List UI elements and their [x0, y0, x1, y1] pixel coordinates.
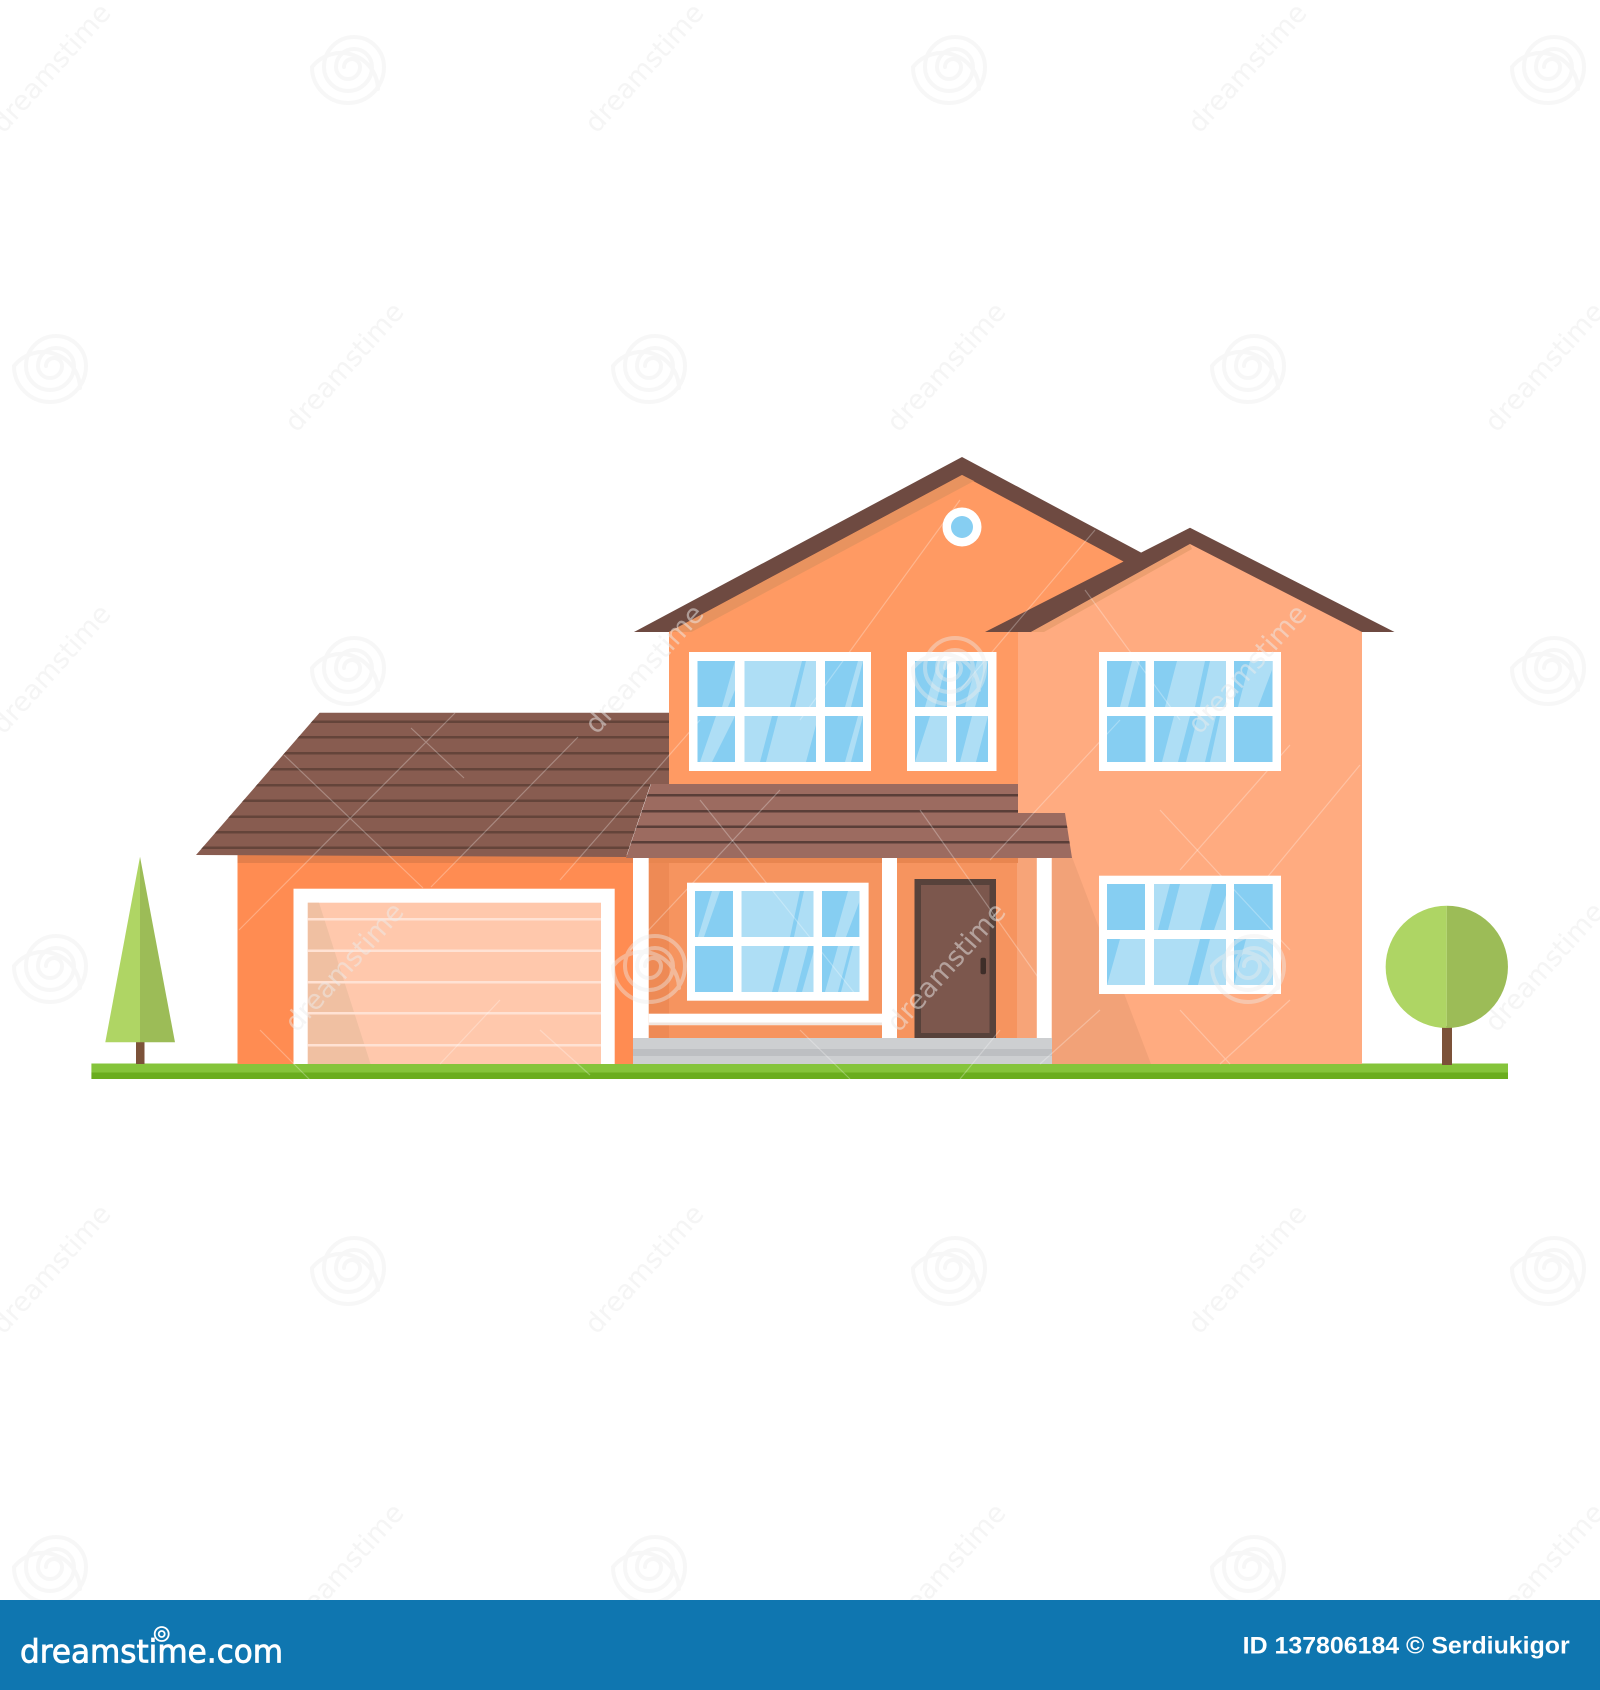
porch steps: [633, 1038, 1052, 1064]
watermark pattern: dreamstime: [279, 897, 410, 1038]
icon: round tree: [1386, 906, 1508, 1065]
window: upper right triple: [1099, 652, 1281, 771]
main gable with roof: [634, 457, 1290, 786]
watermark pattern: dreamstime: [279, 1498, 410, 1639]
watermark pattern: dreamstime: [579, 599, 710, 740]
right wing with roof: [985, 528, 1394, 1064]
icon: cone tree: [105, 857, 175, 1064]
ground strip: [91, 1064, 1508, 1079]
watermark pattern: dreamstime: [1182, 1199, 1313, 1340]
watermark pattern: dreamstime: [881, 1498, 1012, 1639]
watermark pattern: dreamstime: [881, 297, 1012, 438]
porch roof: [620, 784, 1080, 858]
watermark pattern: dreamstime: [279, 297, 410, 438]
window: upper middle double: [907, 652, 996, 771]
front door: [914, 879, 996, 1038]
porch window: [687, 883, 869, 1001]
footer logo text: dreamstime.com: [20, 1633, 283, 1671]
window: upper left triple: [689, 652, 871, 771]
garage roof: [190, 713, 680, 857]
footer image credit: ID 137806184 © Serdiukigor: [1243, 1632, 1570, 1660]
icon: round attic window: [942, 508, 982, 546]
porch railing: [649, 1014, 883, 1025]
garage door: [294, 889, 615, 1064]
watermark pattern: dreamstime: [881, 897, 1012, 1038]
watermark pattern: dreamstime: [1182, 0, 1313, 139]
watermark pattern: dreamstime: [579, 0, 710, 139]
watermark pattern: dreamstime: [1182, 599, 1313, 740]
watermark pattern: dreamstime: [579, 1199, 710, 1340]
garage wall: [238, 855, 634, 1064]
icon: door handle: [980, 958, 986, 974]
window: lower right triple: [1099, 876, 1281, 994]
porch wall: [648, 857, 1037, 1038]
footer bar: [0, 1600, 1600, 1690]
icon: logo spiral: [155, 1627, 169, 1641]
porch pillars: [633, 857, 1052, 1038]
